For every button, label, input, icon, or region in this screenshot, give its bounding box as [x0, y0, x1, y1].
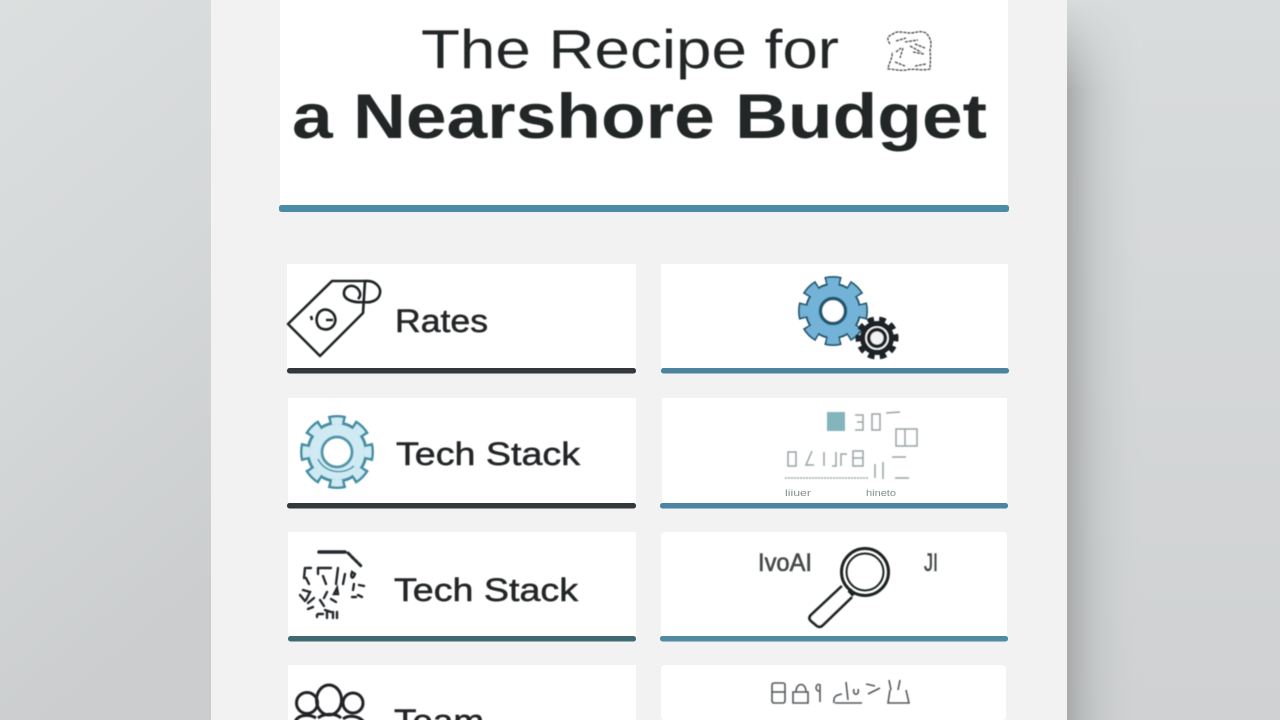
label: tech stack: Tech Stack — [396, 436, 581, 472]
distorted heading right: JI — [924, 549, 938, 577]
distorted heading left: IvoAI — [758, 549, 812, 577]
icon: price tag — [288, 281, 380, 356]
distorted caption right: hineto — [866, 488, 896, 498]
panel: rates card — [287, 264, 636, 374]
panel: gears card — [661, 264, 1009, 374]
panel: tech stack card 2 — [288, 532, 636, 642]
icon: magnifying glass — [810, 548, 888, 627]
panel: magnifier card — [660, 532, 1008, 642]
panel: bottom right card — [661, 665, 1006, 720]
paper sheet — [211, 0, 1067, 720]
icon: distorted cube — [300, 552, 364, 618]
icon: distorted glyph row — [772, 680, 909, 703]
label: rates: Rates — [395, 303, 488, 339]
icon: distorted dashboard — [785, 412, 917, 479]
icon: team — [295, 685, 364, 720]
icon: two gears — [804, 282, 895, 356]
label: tech stack 2: Tech Stack — [394, 572, 579, 608]
icon: header doodle — [888, 32, 931, 70]
panel: header — [280, 0, 1008, 206]
icon: teal gear — [306, 421, 368, 483]
panel: team card — [288, 665, 636, 720]
title line 1: The Recipe for — [421, 18, 839, 80]
panel: tech stack card — [287, 398, 636, 508]
panel: checklist card — [660, 398, 1008, 508]
header rule — [279, 205, 1009, 212]
distorted caption left: liiuer — [785, 488, 811, 498]
title line 2: a Nearshore Budget — [292, 82, 987, 152]
